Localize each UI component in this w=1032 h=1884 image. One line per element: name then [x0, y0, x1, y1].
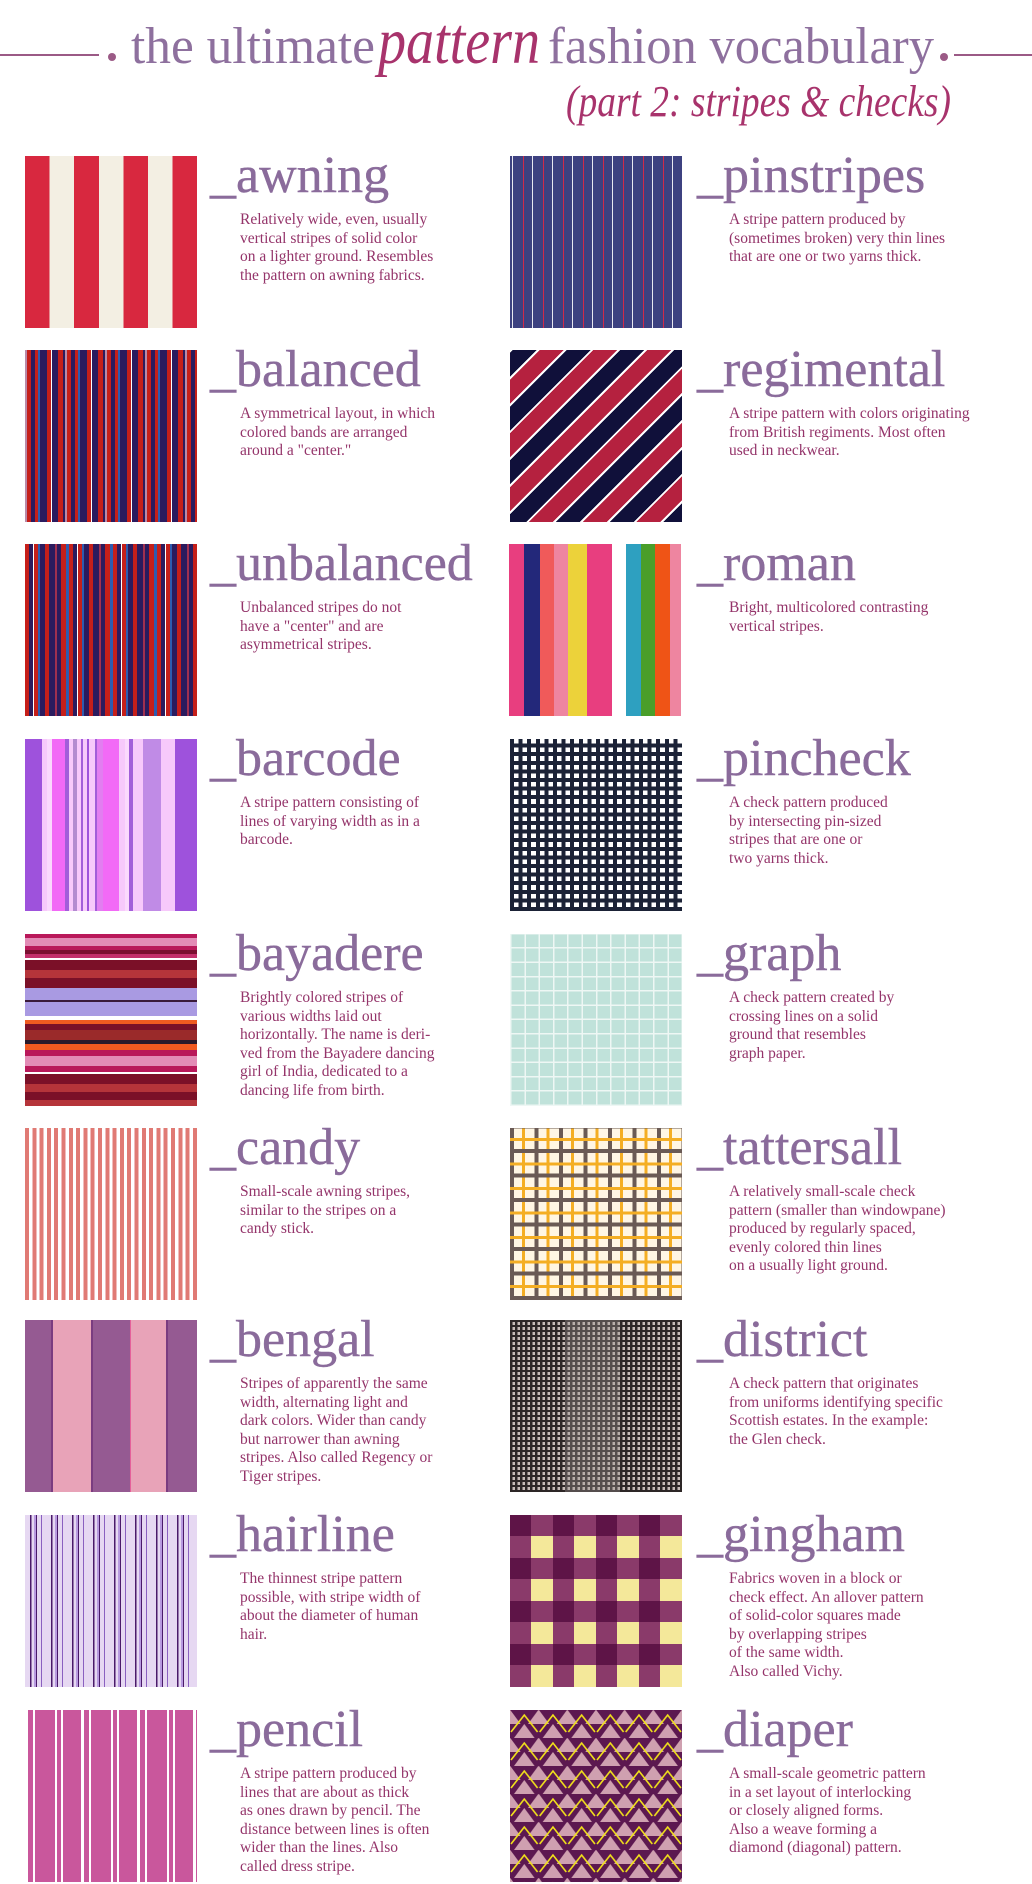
swatch: pinstripes [510, 156, 682, 328]
text: pincheck: stripes that are one or [729, 831, 862, 848]
text: awning: vertical stripes of solid color [240, 230, 417, 246]
swatch: balanced [25, 350, 197, 522]
text: bayadere [240, 989, 435, 1098]
text: candy: candy stick. [240, 1220, 314, 1237]
swatch: hairline [25, 1515, 197, 1687]
text: district: Scottish estates. In the example: [729, 1412, 928, 1429]
text: tattersall: A relatively small-scale check [729, 1183, 915, 1200]
text: pencil: as ones drawn by pencil. The [240, 1802, 420, 1819]
text: tattersall: pattern (smaller than windowpane) [729, 1202, 946, 1218]
text: pincheck: two yarns thick. [729, 850, 828, 866]
text: barcode: A stripe pattern consisting of [240, 794, 419, 811]
text: balanced [240, 405, 435, 459]
text: roman: vertical stripes. [729, 618, 824, 634]
text: gingham: by overlapping stripes [729, 1626, 867, 1642]
text: bengal [240, 1375, 432, 1484]
text: pencil: lines that are about as thick [240, 1784, 409, 1800]
text: pinstripes: A stripe pattern produced by [729, 211, 905, 228]
text: hairline: The thinnest stripe pattern [240, 1570, 402, 1587]
heading: candy: _candy [210, 1119, 360, 1176]
heading: regimental: _regimental [697, 341, 945, 398]
text: balanced: colored bands are arranged [240, 424, 407, 440]
text: district: the Glen check. [729, 1430, 826, 1448]
text: hairline: possible, with stripe width of [240, 1588, 420, 1606]
text: awning: Relatively wide, even, usually [240, 211, 427, 228]
text: bengal: width, alternating light and [240, 1394, 408, 1410]
text: awning [240, 211, 433, 284]
text: graph: crossing lines on a solid [729, 1008, 878, 1024]
heading: district: _district [697, 1311, 867, 1368]
text: awning: the pattern on awning fabrics. [240, 266, 425, 284]
swatch: bayadere [25, 934, 197, 1106]
heading: bayadere: _bayadere [210, 925, 424, 982]
text: pencil: distance between lines is often [240, 1820, 429, 1838]
swatch: candy [25, 1128, 197, 1300]
swatch: district [510, 1320, 682, 1492]
text: graph: graph paper. [729, 1044, 806, 1062]
text: pencil: wider than the lines. Also [240, 1839, 398, 1856]
text: hairline: about the diameter of human [240, 1607, 418, 1624]
text: graph: A check pattern created by [729, 989, 894, 1006]
text: hairline [240, 1570, 420, 1642]
text: candy: Small-scale awning stripes, [240, 1183, 410, 1200]
text: diaper: A small-scale geometric pattern [729, 1765, 926, 1782]
swatch: regimental [510, 350, 682, 522]
text: regimental [729, 405, 970, 459]
heading: graph: _graph [697, 925, 841, 982]
text: bengal: but narrower than awning [240, 1430, 400, 1448]
text: graph: ground that resembles [729, 1026, 866, 1043]
text: unbalanced: have a "center" and are [240, 618, 383, 634]
heading: balanced: _balanced [210, 341, 421, 398]
text: unbalanced: asymmetrical stripes. [240, 636, 372, 653]
text: bayadere: girl of India, dedicated to a [240, 1063, 408, 1080]
heading: awning: _awning [210, 147, 389, 204]
text: bengal: Tiger stripes. [240, 1468, 321, 1484]
swatch: bengal [25, 1320, 197, 1492]
text: pencil: A stripe pattern produced by [240, 1765, 416, 1782]
text: pincheck: by intersecting pin-sized [729, 812, 881, 830]
heading: barcode: _barcode [210, 730, 401, 787]
text: awning: on a lighter ground. Resembles [240, 248, 433, 265]
text: bengal: Stripes of apparently the same [240, 1375, 428, 1392]
text: bengal: stripes. Also called Regency or [240, 1449, 432, 1466]
text: hairline: hair. [240, 1626, 267, 1642]
text: bayadere: dancing life from birth. [240, 1082, 385, 1098]
text: diaper: diamond (diagonal) pattern. [729, 1839, 902, 1856]
heading: roman: _roman [697, 535, 856, 592]
text: graph [729, 989, 894, 1062]
text: gingham: Fabrics woven in a block or [729, 1570, 902, 1587]
swatch: tattersall [510, 1128, 682, 1300]
text: balanced: A symmetrical layout, in which [240, 405, 435, 422]
heading: bengal: _bengal [210, 1311, 375, 1368]
title: fashion vocabulary [548, 18, 934, 75]
text: tattersall: on a usually light ground. [729, 1257, 888, 1274]
text: barcode: barcode. [240, 831, 293, 848]
heading: gingham: _gingham [697, 1506, 905, 1563]
text: pincheck: A check pattern produced [729, 794, 888, 811]
swatch: diaper [510, 1710, 682, 1882]
text: pincheck [729, 794, 888, 866]
text: barcode: lines of varying width as in a [240, 812, 420, 830]
heading: hairline: _hairline [210, 1506, 395, 1563]
title: (part 2: stripes & checks) [566, 77, 951, 126]
text: bayadere: horizontally. The name is deri- [240, 1026, 430, 1043]
heading: unbalanced: _unbalanced [210, 535, 473, 592]
text: pencil: called dress stripe. [240, 1858, 355, 1874]
text: roman [729, 599, 928, 634]
text: bayadere: Brightly colored stripes of [240, 989, 403, 1006]
heading: pencil: _pencil [210, 1701, 363, 1758]
heading: tattersall: _tattersall [697, 1119, 902, 1176]
swatch: gingham [510, 1515, 682, 1687]
text: tattersall [729, 1183, 946, 1274]
title: pattern [375, 5, 540, 78]
text: gingham [729, 1570, 924, 1680]
swatch: barcode [25, 739, 197, 911]
text: candy: similar to the stripes on a [240, 1202, 396, 1218]
text: tattersall: evenly colored thin lines [729, 1238, 882, 1256]
text: barcode [240, 794, 420, 848]
title [0, 5, 1032, 126]
text: district: from uniforms identifying specific [729, 1394, 943, 1410]
text: bayadere: various widths laid out [240, 1008, 382, 1024]
text: pinstripes [729, 211, 945, 265]
heading: pinstripes: _pinstripes [697, 147, 925, 204]
text: diaper: in a set layout of interlocking [729, 1784, 911, 1800]
text: district: A check pattern that originates [729, 1375, 918, 1392]
text: regimental: used in neckwear. [729, 442, 840, 459]
title: the ultimate [131, 18, 375, 75]
text: balanced: around a "center." [240, 442, 351, 459]
swatch: roman [509, 544, 681, 716]
text: pencil [240, 1765, 430, 1874]
text: district [729, 1375, 943, 1448]
heading: pincheck: _pincheck [697, 730, 911, 787]
swatch: pincheck [510, 739, 682, 911]
text: regimental: from British regiments. Most often [729, 424, 946, 440]
heading: diaper: _diaper [697, 1701, 853, 1758]
text: roman: Bright, multicolored contrasting [729, 599, 928, 616]
text: tattersall: produced by regularly spaced, [729, 1220, 916, 1237]
text: diaper: Also a weave forming a [729, 1820, 877, 1838]
text: unbalanced: Unbalanced stripes do not [240, 599, 401, 616]
swatch: unbalanced [25, 544, 197, 716]
text: pinstripes: (sometimes broken) very thin lines [729, 230, 945, 246]
text: candy [240, 1183, 410, 1237]
text: pinstripes: that are one or two yarns thick. [729, 248, 921, 265]
text: gingham: check effect. An allover pattern [729, 1588, 924, 1606]
swatch: awning [25, 156, 197, 328]
text: gingham: Also called Vichy. [729, 1662, 843, 1680]
text: bayadere: ved from the Bayadere dancing [240, 1044, 435, 1062]
text: unbalanced [240, 599, 402, 653]
swatch: graph [510, 934, 682, 1106]
text: diaper: or closely aligned forms. [729, 1802, 883, 1819]
text: bengal: dark colors. Wider than candy [240, 1412, 426, 1429]
text: regimental: A stripe pattern with colors originating [729, 405, 970, 422]
text: gingham: of solid-color squares made [729, 1607, 901, 1624]
swatch: pencil [25, 1710, 197, 1882]
text: diaper [729, 1765, 926, 1856]
text: gingham: of the same width. [729, 1644, 844, 1661]
